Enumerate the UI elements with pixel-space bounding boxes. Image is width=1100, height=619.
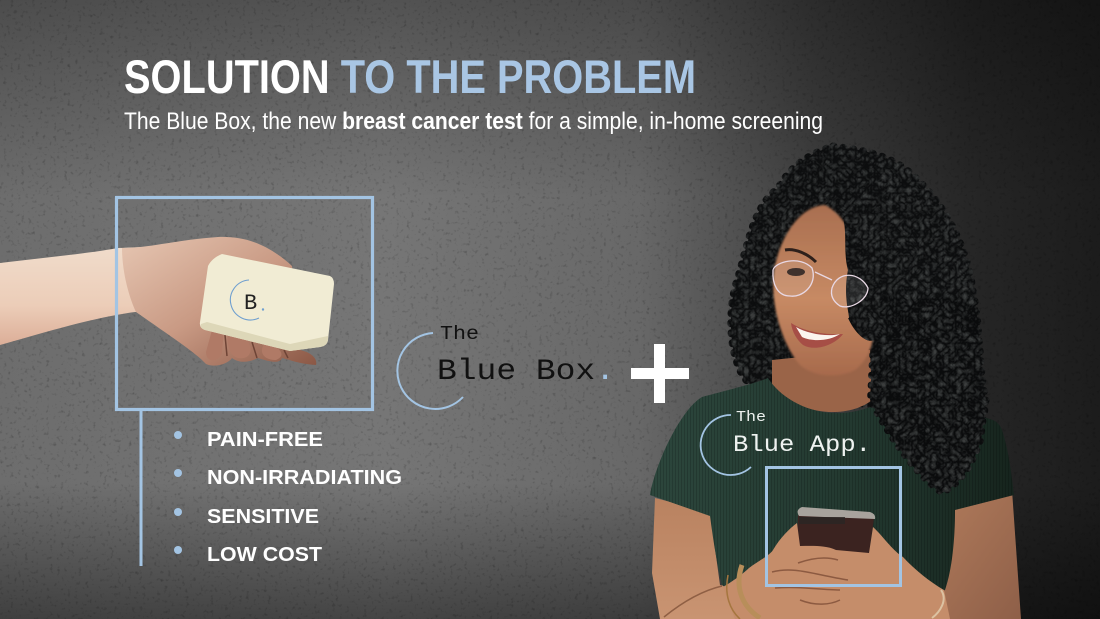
soap logo [230, 280, 264, 320]
left arm [652, 498, 790, 619]
logo: The Blue Box [397, 323, 615, 409]
photo: hand holding the Blue Box [0, 237, 334, 366]
hand [122, 237, 316, 366]
shirt ribbing [650, 378, 1014, 619]
soap underside [200, 322, 328, 351]
bracelets [727, 565, 944, 619]
finger gaps [225, 335, 288, 358]
fingers [206, 330, 281, 360]
soap logo: B [244, 291, 257, 316]
list item: non-irradiating: NON-IRRADIATING [207, 467, 402, 489]
connector line to list [140, 411, 142, 566]
eyebrow [785, 250, 816, 262]
hair back [731, 146, 986, 493]
list item: sensitive: SENSITIVE [207, 506, 319, 528]
hair lock over face [838, 200, 885, 341]
finger highlights and creases [772, 558, 848, 604]
glasses [773, 261, 868, 307]
neck [772, 350, 872, 412]
logo: The Blue Box: Blue Box . [437, 355, 615, 389]
logo: The Blue App: The [736, 409, 766, 426]
logo: The Blue App [701, 409, 871, 475]
logo: The Blue Box: The [440, 323, 479, 345]
smile [791, 323, 843, 348]
title: SOLUTION TO THE PROBLEM [124, 50, 696, 103]
soap bar [200, 254, 334, 351]
shirt [650, 378, 1014, 619]
photo: woman with smartphone [650, 146, 1021, 619]
plus sign [631, 344, 689, 403]
face [773, 205, 874, 375]
right arm [929, 490, 1021, 619]
blue frame around the phone [766, 468, 900, 586]
arm [0, 246, 170, 345]
hair over shoulder [870, 300, 986, 493]
hands [723, 523, 950, 619]
subtitle: The Blue Box, the new breast cancer test for a simple, in-home screening [124, 108, 823, 135]
arm crease [664, 586, 722, 617]
phone [797, 507, 875, 554]
list item: pain-free: PAIN-FREE [207, 429, 323, 451]
benefits list [174, 429, 402, 566]
blue frame around the box [116, 198, 372, 410]
logo: The Blue App: Blue App. [733, 432, 871, 458]
eye [787, 268, 805, 276]
list item: low cost: LOW COST [207, 544, 322, 566]
